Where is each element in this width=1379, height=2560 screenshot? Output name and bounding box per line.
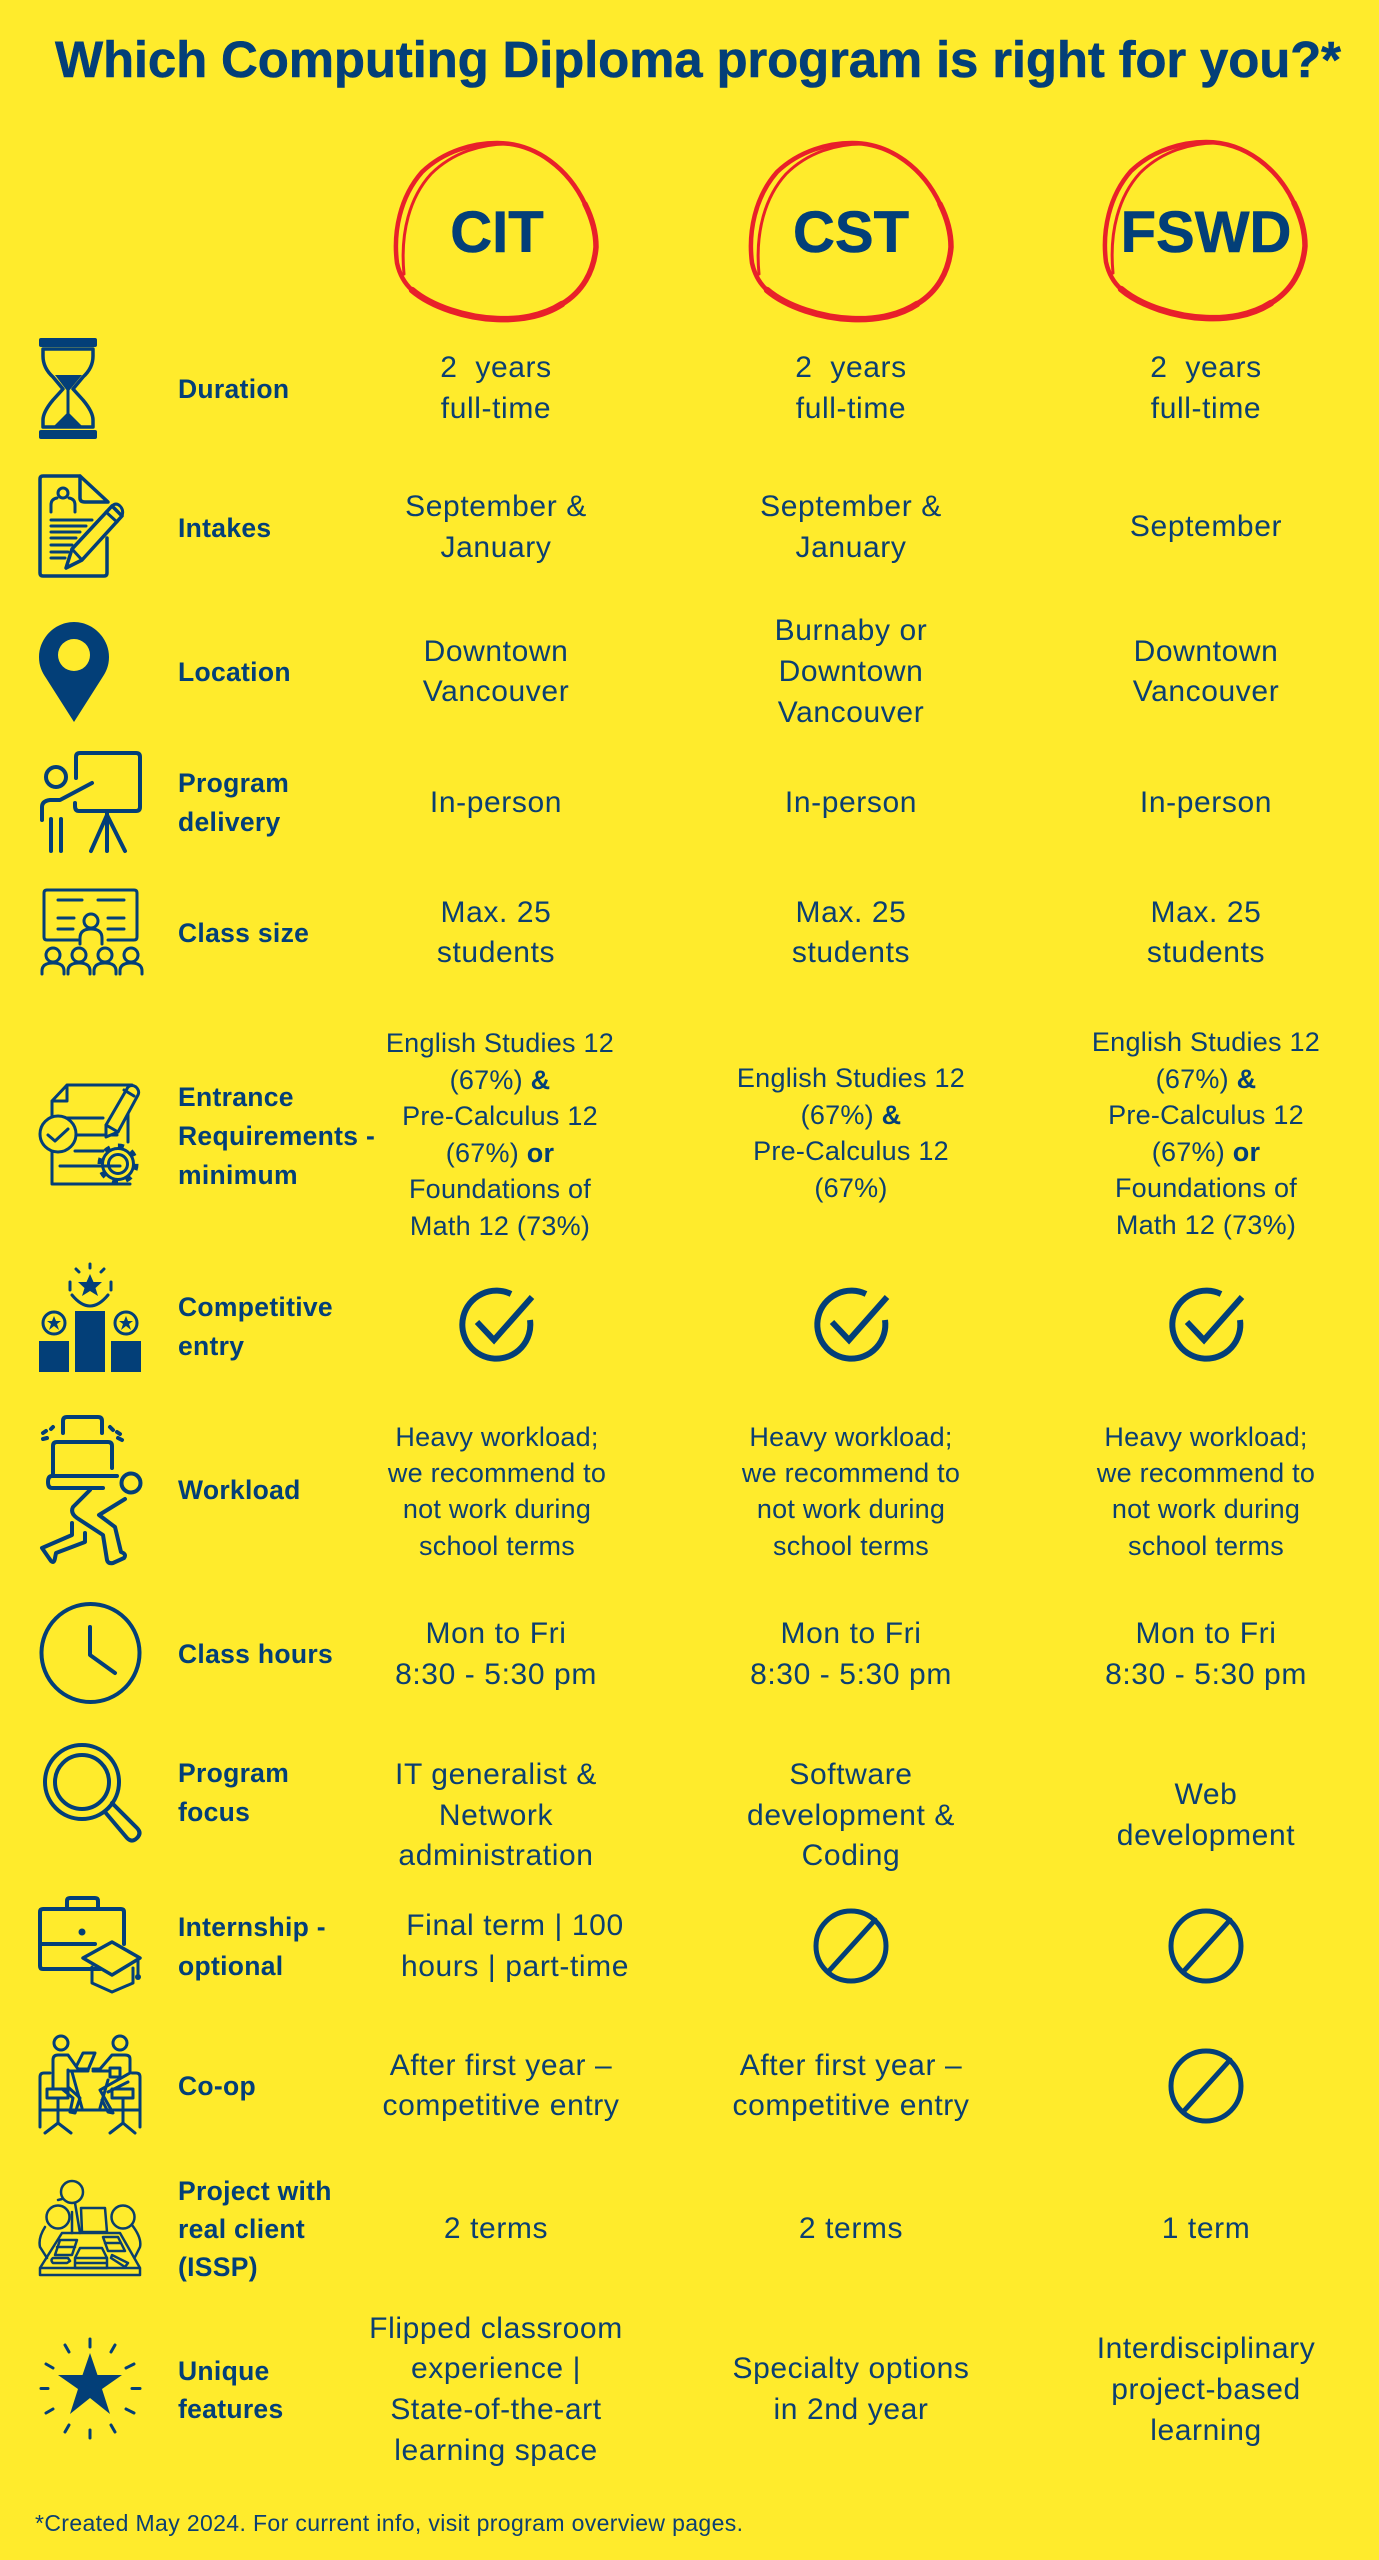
FSWD class size: students (1147, 936, 1265, 969)
icon: clock (42, 1604, 140, 1702)
row: internship (40, 1898, 1241, 1992)
label: Workload: Workload (178, 1475, 301, 1505)
FSWD workload: school terms (1128, 1531, 1284, 1561)
CST delivery: In-person (785, 786, 917, 819)
CIT delivery: In-person (430, 786, 562, 819)
row: class size (42, 890, 1265, 974)
FSWD unique features: learning (1150, 2414, 1262, 2447)
CST duration: 2 years (795, 351, 907, 384)
CIT duration: 2 years (440, 351, 552, 384)
label: Program delivery: delivery (178, 807, 281, 837)
CIT class hours: 8:30 - 5:30 pm (395, 1658, 597, 1691)
column header: CST: CST (793, 200, 909, 265)
icon: document with check, pencil and gear (40, 1085, 139, 1184)
CST class size: Max. 25 (796, 896, 906, 929)
label: Program focus: focus (178, 1797, 250, 1827)
FSWD location: Downtown (1134, 635, 1278, 668)
CIT duration: full-time (441, 392, 551, 425)
FSWD entrance requirements: English Studies 12 (1092, 1027, 1320, 1057)
CIT unique features: experience | (411, 2352, 581, 2385)
FSWD entrance requirements: (67%) or (1152, 1137, 1260, 1167)
FSWD co-op: not available (1171, 2051, 1241, 2121)
CST entrance requirements: (67%) (814, 1173, 888, 1203)
label: Program delivery: Program (178, 768, 289, 798)
CST entrance requirements: (67%) & (801, 1100, 901, 1130)
column header: CIT (396, 143, 596, 319)
CIT workload: school terms (419, 1531, 575, 1561)
icon: podium with stars (39, 1264, 141, 1372)
CST class size: students (792, 936, 910, 969)
CST intakes: January (796, 531, 906, 564)
FSWD duration: full-time (1151, 392, 1261, 425)
CST workload: not work during (757, 1494, 945, 1524)
CIT class hours: Mon to Fri (425, 1617, 567, 1650)
CIT location: Vancouver (423, 675, 569, 708)
CIT program focus: administration (398, 1839, 594, 1872)
CST duration: full-time (796, 392, 906, 425)
CIT co-op: After first year – (390, 2049, 612, 2082)
label: Internship - optional: optional (178, 1951, 283, 1981)
CST project terms: 2 terms (799, 2212, 903, 2245)
FSWD entrance requirements: Foundations of (1115, 1173, 1297, 1203)
icon: team around a table (40, 2181, 140, 2275)
CST unique features: Specialty options (732, 2352, 970, 2385)
CIT co-op: competitive entry (383, 2089, 619, 2122)
CIT unique features: State-of-the-art (390, 2393, 602, 2426)
CIT intakes: January (441, 531, 551, 564)
CST location: Burnaby or (775, 614, 927, 647)
CIT unique features: learning space (394, 2434, 598, 2467)
CIT project terms: 2 terms (444, 2212, 548, 2245)
FSWD entrance requirements: Pre-Calculus 12 (1108, 1100, 1304, 1130)
row: class hours (42, 1604, 1307, 1702)
icon: person carrying laptop (42, 1417, 140, 1563)
label: Co-op: Co-op (178, 2071, 256, 2101)
CIT entrance requirements: Pre-Calculus 12 (402, 1101, 598, 1131)
icon: briefcase and graduation cap (40, 1898, 141, 1992)
CIT entrance requirements: English Studies 12 (386, 1028, 614, 1058)
CST intakes: September & (760, 490, 942, 523)
FSWD unique features: Interdisciplinary (1097, 2332, 1315, 2365)
row: program delivery (42, 753, 1272, 851)
label: Competitive entry: Competitive (178, 1292, 333, 1322)
icon: shining star (41, 2339, 140, 2438)
CIT entrance requirements: Foundations of (409, 1174, 591, 1204)
label: Unique features: Unique (178, 2356, 270, 2386)
label: Unique features: features (178, 2394, 284, 2424)
label: Entrance Requirements - minimum: Entrance (178, 1082, 294, 1112)
label: Internship - optional: Internship - (178, 1912, 326, 1942)
CIT internship: Final term | 100 (406, 1909, 624, 1942)
icon: two people at a desk (40, 2036, 140, 2133)
CST workload: we recommend to (741, 1458, 960, 1488)
FSWD workload: Heavy workload; (1104, 1422, 1308, 1452)
CIT class size: Max. 25 (441, 896, 551, 929)
row: intakes (40, 476, 1282, 576)
FSWD class hours: 8:30 - 5:30 pm (1105, 1658, 1307, 1691)
icon: map pin (39, 622, 109, 722)
FSWD workload: we recommend to (1096, 1458, 1315, 1488)
footnote: *Created May 2024. For current info, visit program overview pages. (35, 2510, 743, 2536)
CST workload: school terms (773, 1531, 929, 1561)
column header: CST (751, 143, 951, 319)
label: Location: Location (178, 657, 291, 687)
CIT entrance requirements: (67%) or (446, 1138, 554, 1168)
label: Intakes: Intakes (178, 513, 271, 543)
label: Class hours: Class hours (178, 1639, 333, 1669)
row: co-op (40, 2036, 1241, 2133)
CIT workload: Heavy workload; (395, 1422, 599, 1452)
row: unique features (41, 2312, 1315, 2467)
CST location: Vancouver (778, 696, 924, 729)
FSWD project terms: 1 term (1162, 2212, 1250, 2245)
CIT competitive: check mark (462, 1291, 532, 1359)
icon: magnifying glass (45, 1745, 140, 1840)
CIT workload: not work during (403, 1494, 591, 1524)
icon: classroom with students (42, 890, 142, 974)
FSWD delivery: In-person (1140, 786, 1272, 819)
CST entrance requirements: Pre-Calculus 12 (753, 1136, 949, 1166)
icon: application form and pencil (40, 476, 123, 576)
FSWD workload: not work during (1112, 1494, 1300, 1524)
label: Project with real client (ISSP): (ISSP) (178, 2252, 258, 2282)
CIT internship: hours | part-time (401, 1950, 629, 1983)
row: entrance requirements (40, 1027, 1320, 1241)
label: Duration: Duration (178, 374, 289, 404)
CST co-op: After first year – (740, 2049, 962, 2082)
title: Which Computing Diploma program is right for you?* (55, 31, 1341, 88)
CIT unique features: Flipped classroom (369, 2312, 623, 2345)
icon: hourglass (39, 338, 97, 439)
label: Class size: Class size (178, 918, 309, 948)
label: Program focus: Program (178, 1758, 289, 1788)
label: Competitive entry: entry (178, 1331, 244, 1361)
row: workload (42, 1417, 1315, 1563)
icon: presenter at board (42, 753, 140, 851)
FSWD internship: not available (1171, 1911, 1241, 1981)
FSWD intakes: September (1130, 510, 1282, 543)
CIT class size: students (437, 936, 555, 969)
CIT location: Downtown (424, 635, 568, 668)
FSWD entrance requirements: (67%) & (1156, 1064, 1256, 1094)
CST location: Downtown (779, 655, 923, 688)
CST internship: not available (816, 1911, 886, 1981)
row: duration (39, 338, 1262, 439)
CIT entrance requirements: Math 12 (73%) (410, 1211, 590, 1241)
CST program focus: Coding (802, 1839, 900, 1872)
label: Entrance Requirements - minimum: minimum (178, 1160, 298, 1190)
label: Project with real client (ISSP): Project with (178, 2176, 332, 2206)
column header: FSWD: FSWD (1121, 200, 1291, 265)
CST unique features: in 2nd year (773, 2393, 929, 2426)
CST competitive: check mark (817, 1291, 887, 1359)
row: location (39, 614, 1279, 729)
FSWD program focus: development (1117, 1819, 1295, 1852)
CST program focus: Software (789, 1758, 913, 1791)
row: competitive entry (39, 1264, 1242, 1372)
CIT program focus: IT generalist & (395, 1758, 597, 1791)
FSWD class size: Max. 25 (1151, 896, 1261, 929)
column header: CIT: CIT (450, 200, 544, 265)
CST class hours: Mon to Fri (780, 1617, 922, 1650)
CST program focus: development & (747, 1799, 955, 1832)
CIT intakes: September & (405, 490, 587, 523)
FSWD location: Vancouver (1133, 675, 1279, 708)
CST entrance requirements: English Studies 12 (737, 1063, 965, 1093)
row: program focus (45, 1745, 1295, 1872)
CST co-op: competitive entry (733, 2089, 969, 2122)
FSWD unique features: project-based (1111, 2373, 1301, 2406)
column header: FSWD (1105, 142, 1305, 318)
CIT program focus: Network (439, 1799, 554, 1832)
FSWD entrance requirements: Math 12 (73%) (1116, 1210, 1296, 1240)
label: Project with real client (ISSP): real client (178, 2214, 305, 2244)
row: project with real client (40, 2176, 1250, 2282)
CST workload: Heavy workload; (749, 1422, 953, 1452)
FSWD duration: 2 years (1150, 351, 1262, 384)
label: Entrance Requirements - minimum: Requirements - (178, 1121, 375, 1151)
FSWD class hours: Mon to Fri (1135, 1617, 1277, 1650)
FSWD program focus: Web (1175, 1778, 1237, 1811)
FSWD competitive: check mark (1172, 1291, 1242, 1359)
CST class hours: 8:30 - 5:30 pm (750, 1658, 952, 1691)
CIT workload: we recommend to (387, 1458, 606, 1488)
CIT entrance requirements: (67%) & (450, 1065, 550, 1095)
